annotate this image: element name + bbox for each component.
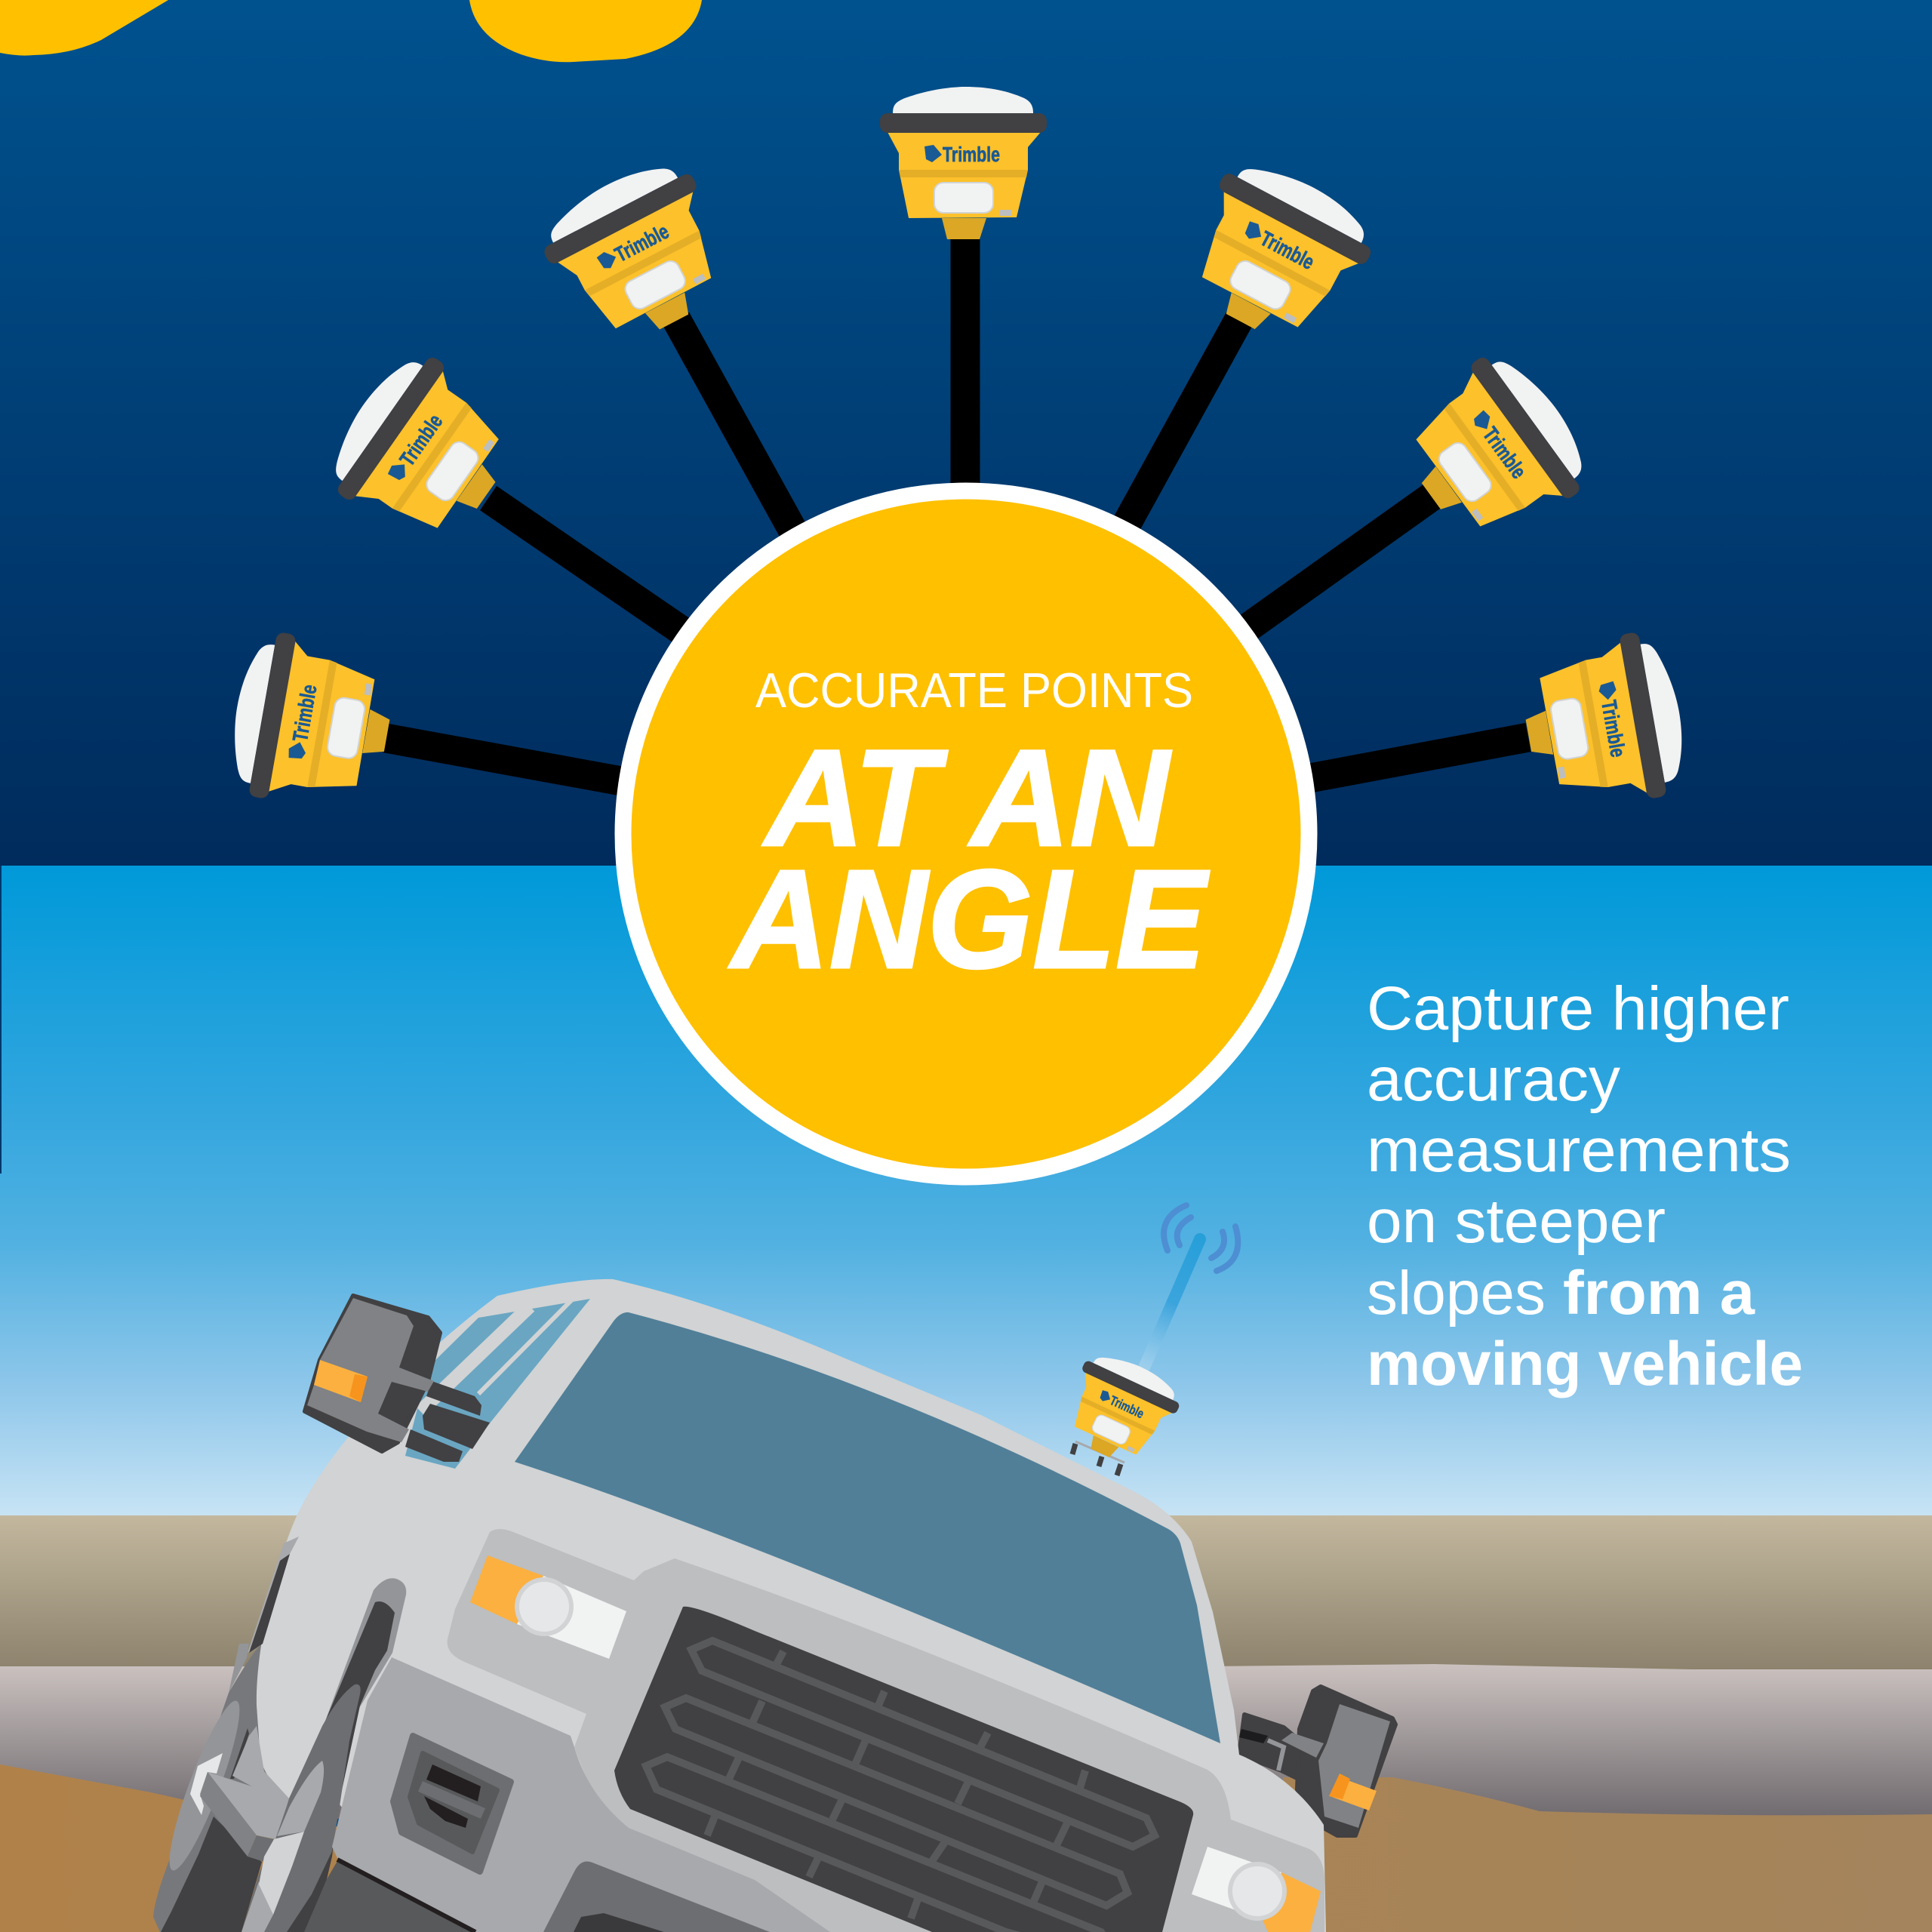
front wheel arch: [289, 1578, 406, 1798]
right mirror: [1239, 1687, 1395, 1835]
receiver upper left: [530, 148, 830, 598]
truck: [153, 1279, 1395, 1932]
lower centre panel: [543, 1861, 770, 1932]
mount plate: [1075, 1441, 1124, 1463]
signal beam: [1145, 1239, 1200, 1366]
receiver top: [880, 87, 1047, 528]
mirror arm slit: [1239, 1729, 1268, 1743]
arm side: [200, 1772, 257, 1857]
line 5 bold: from a: [1563, 1259, 1755, 1327]
bulb: [1230, 1864, 1284, 1918]
mirror amber shade: [1329, 1774, 1350, 1799]
receiver: [1053, 1345, 1188, 1475]
thin shadow: [230, 1728, 249, 1779]
receiver far right: Trimble: [1597, 698, 1630, 759]
roof antenna receiver: [1053, 1205, 1238, 1475]
grille: [614, 1606, 1194, 1932]
truck body: [257, 1279, 1326, 1932]
receiver far right: [1245, 627, 1693, 818]
line 2: accuracy: [1367, 1045, 1620, 1114]
mirror face: [1318, 1704, 1390, 1828]
receiver far left: Trimble: [288, 683, 321, 743]
clear lens: [1192, 1847, 1281, 1920]
kicker: accurate points: ACCURATE POINTS: [755, 663, 1193, 718]
rear tire: [153, 1643, 283, 1932]
suspension wedge: [232, 1726, 289, 1806]
front tire: [242, 1684, 361, 1932]
dirt ground: [0, 1764, 1932, 1932]
rear arch shadow: [249, 1554, 290, 1653]
receiver fan: [223, 87, 1693, 818]
arm middle: [423, 1404, 490, 1449]
window glass: [405, 1299, 590, 1469]
receiver mid right: Trimble: [1478, 423, 1531, 483]
mirror amber light: [314, 1360, 368, 1402]
receiver mid left: Trimble: [395, 410, 448, 470]
amber lens: [1263, 1872, 1321, 1932]
lower bumper: [332, 1657, 830, 1932]
lower intake: [574, 1913, 664, 1932]
yellow blob: top centre: [469, 0, 702, 62]
line 1: Capture higher: [1367, 974, 1789, 1043]
arm lower: [405, 1429, 463, 1462]
receiver: Trimble: [1108, 1392, 1146, 1422]
window pillar 2: [478, 1299, 573, 1394]
hub lower: [242, 1881, 273, 1932]
rear wheel arch: [248, 1537, 299, 1653]
amber lens: [470, 1555, 543, 1624]
mirror back: [305, 1296, 440, 1451]
line 6 bold: moving vehicle: [1367, 1330, 1803, 1398]
line 3: measurements: [1367, 1116, 1791, 1185]
circle: [623, 491, 1309, 1177]
mirror arm base: [1239, 1715, 1308, 1783]
vent upper: [426, 1764, 481, 1801]
night sky background: [0, 0, 1932, 866]
receiver far left: [223, 627, 679, 818]
signal waves: [1164, 1205, 1238, 1271]
hub: [158, 1696, 251, 1875]
bumper shadow line: [337, 1860, 475, 1932]
windshield: [515, 1312, 1220, 1743]
left edge sliver: [0, 866, 2, 1174]
window pillar 1: [420, 1306, 530, 1411]
tire outer: [153, 1643, 283, 1932]
left mirror: [305, 1296, 490, 1462]
arm end: [248, 1835, 274, 1862]
arm upper: [426, 1381, 481, 1416]
central circle badge: [623, 491, 1309, 1177]
arm top: [208, 1772, 289, 1839]
receiver upper right: [1087, 148, 1386, 596]
receiver upper right: Trimble: [1257, 226, 1318, 274]
bracket 1: [190, 1753, 223, 1815]
receiver mid right: [1192, 339, 1604, 667]
tire shadow: [161, 1817, 262, 1932]
heading line 1: AT AN: [762, 721, 1172, 875]
far hills: [0, 1515, 1932, 1678]
tire outer: [242, 1684, 361, 1932]
description text: [1367, 974, 1803, 1398]
back strut: [229, 1644, 249, 1693]
grille surround: [448, 1529, 1324, 1932]
lower left panel: [304, 1861, 472, 1932]
bulb: [517, 1580, 571, 1634]
clear lens: [517, 1576, 626, 1659]
day sky background: [0, 866, 1932, 1518]
bracket 2: [259, 1832, 304, 1915]
suspension arm: [190, 1753, 304, 1915]
receiver top: Trimble: [943, 143, 1000, 166]
bar: [420, 1786, 483, 1814]
yellow blob: top left: [0, 0, 168, 56]
front arch shadow: [283, 1601, 395, 1932]
mirror arm strut: [1268, 1740, 1284, 1770]
right headlight: [1192, 1847, 1321, 1932]
mirror arm: [1281, 1733, 1324, 1758]
mirror amber shade: [349, 1374, 368, 1402]
receiver mid left: [313, 340, 755, 681]
line 5 regular: slopes: [1367, 1259, 1546, 1327]
mount legs: [1072, 1444, 1121, 1475]
mirror back: [1297, 1687, 1395, 1835]
grille panel: [614, 1606, 1194, 1932]
inner: [410, 1753, 497, 1852]
left headlight: [470, 1555, 626, 1659]
side windows: [405, 1299, 590, 1469]
line 4: on steeper: [1367, 1187, 1666, 1256]
mid hills: [0, 1664, 1932, 1819]
mirror face: [307, 1298, 434, 1442]
outer: [393, 1736, 511, 1872]
receiver upper left: Trimble: [611, 220, 672, 266]
vent lower: [424, 1796, 468, 1828]
hub upper: [277, 1761, 324, 1836]
grille bars: [646, 1641, 1155, 1932]
mirror amber light: [1330, 1777, 1377, 1810]
heading line 2: ANGLE: [728, 841, 1210, 998]
fog light: [393, 1736, 511, 1872]
